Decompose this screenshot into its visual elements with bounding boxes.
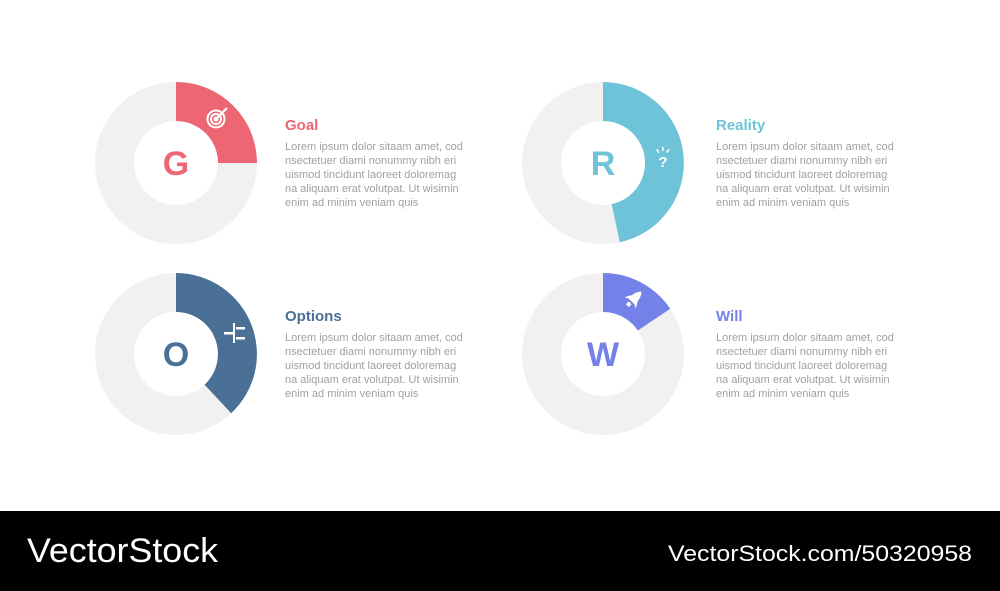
heading: Will: Will: [716, 308, 743, 325]
text block: Options: nsectetuer diami nonummy nibh eri: [285, 346, 456, 358]
text block: Options: na aliquam erat volutpat. Ut wisimin: [285, 374, 459, 386]
icon: target: [208, 108, 227, 128]
text block: Reality: na aliquam erat volutpat. Ut wisimin: [716, 183, 890, 195]
text block: Goal: nsectetuer diami nonummy nibh eri: [285, 155, 456, 167]
panel: Reality: [542, 82, 894, 242]
donut: Goal: G: [163, 145, 189, 183]
text block: Reality: nsectetuer diami nonummy nibh eri: [716, 155, 887, 167]
panel: Will: [542, 273, 894, 416]
text block: Reality: enim ad minim veniam quis: [716, 197, 850, 209]
icon: question: ?: [658, 154, 668, 171]
icon: question: [656, 147, 670, 171]
footer url: VectorStock.com/50320958: [668, 541, 972, 566]
footer logo: VectorStock: [27, 532, 219, 570]
donut: Will: W: [587, 336, 620, 374]
donut: Options: O: [163, 336, 189, 374]
heading: Options: Options: [285, 308, 342, 325]
text block: Options: uismod tincidunt laoreet doloremag: [285, 360, 456, 372]
text block: Goal: enim ad minim veniam quis: [285, 197, 419, 209]
heading: Reality: Reality: [716, 117, 766, 134]
text block: Reality: uismod tincidunt laoreet doloremag: [716, 169, 887, 181]
panel: Goal: [114, 82, 463, 224]
icon: signpost: [224, 323, 245, 343]
text block: Options: Lorem ipsum dolor sitaam amet, cod: [285, 332, 463, 344]
donut: Goal: [114, 82, 257, 224]
text block: Goal: uismod tincidunt laoreet doloremag: [285, 169, 456, 181]
icon: rocket: [622, 286, 647, 311]
donut: Options: [114, 273, 257, 416]
text block: Goal: Lorem ipsum dolor sitaam amet, cod: [285, 141, 463, 153]
text block: Will: enim ad minim veniam quis: [716, 388, 850, 400]
footer: [0, 511, 1000, 591]
donut: Will: [542, 273, 670, 416]
text block: Will: uismod tincidunt laoreet doloremag: [716, 360, 887, 372]
text block: Will: na aliquam erat volutpat. Ut wisimin: [716, 374, 890, 386]
donut: Reality: [542, 82, 684, 242]
text block: Options: enim ad minim veniam quis: [285, 388, 419, 400]
text block: Reality: Lorem ipsum dolor sitaam amet, cod: [716, 141, 894, 153]
text block: Will: nsectetuer diami nonummy nibh eri: [716, 346, 887, 358]
text block: Goal: na aliquam erat volutpat. Ut wisimin: [285, 183, 459, 195]
donut: Reality: R: [591, 145, 615, 183]
text block: Will: Lorem ipsum dolor sitaam amet, cod: [716, 332, 894, 344]
panel: Options: [114, 273, 463, 416]
heading: Goal: Goal: [285, 117, 318, 134]
